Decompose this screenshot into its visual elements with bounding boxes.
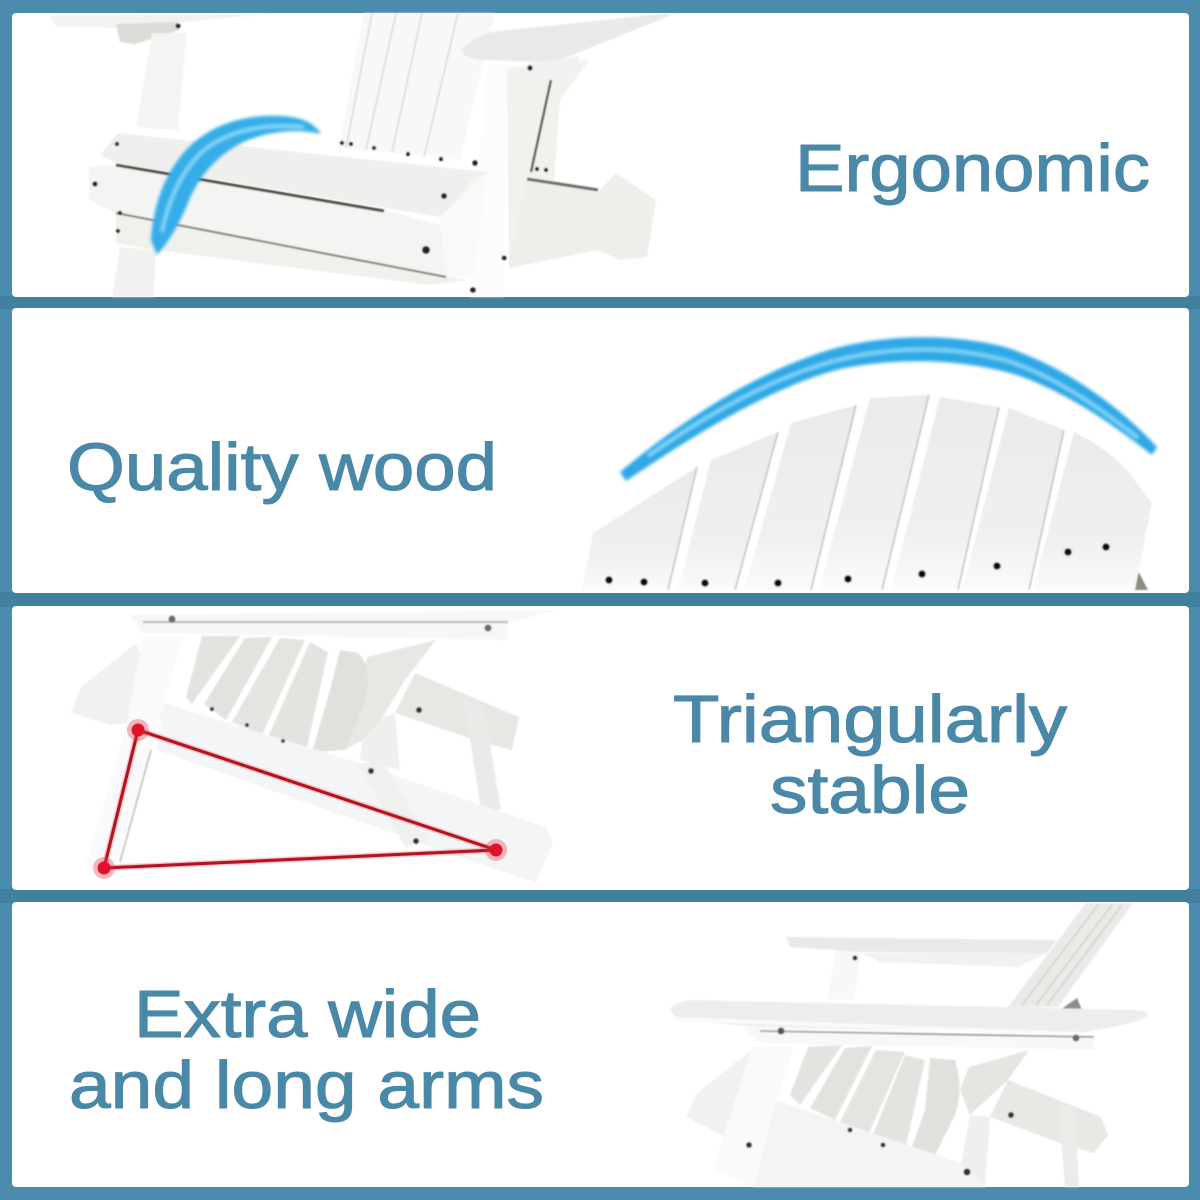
backrest slats illustration	[582, 395, 1152, 590]
heading: Extra wide and long arms: Extra wide	[134, 977, 481, 1052]
chair seat detail illustration	[50, 13, 674, 297]
triangle: red stability lines	[93, 719, 507, 879]
panel: quality wood	[12, 308, 1189, 593]
heading: Triangularly stable	[673, 682, 1068, 828]
heading: Ergonomic: Ergonomic	[795, 131, 1150, 206]
chair arm illustration	[670, 903, 1148, 1187]
panel: triangularly stable	[12, 606, 1189, 890]
heading: Quality wood: Quality wood	[67, 430, 497, 505]
panel: ergonomic	[12, 13, 1189, 297]
panel: extra wide arms	[12, 902, 1189, 1187]
heading: Triangularly stable: stable	[770, 753, 970, 828]
folded chair side illustration	[71, 610, 556, 883]
heading: Extra wide and long arms	[69, 977, 544, 1123]
icon: blue curve on seat	[151, 116, 321, 255]
heading: Extra wide and long arms: and long arms	[69, 1048, 544, 1123]
icon: blue arc over backrest	[620, 337, 1157, 481]
heading: Triangularly stable: Triangularly	[673, 682, 1068, 757]
